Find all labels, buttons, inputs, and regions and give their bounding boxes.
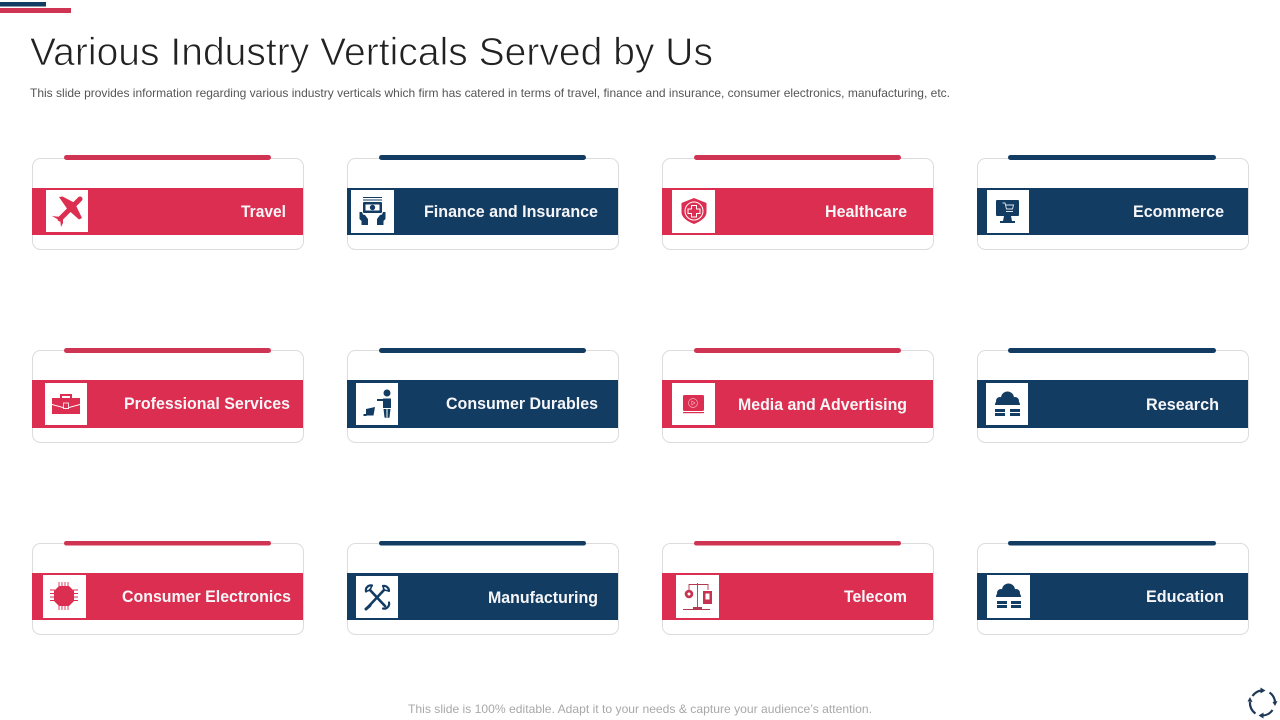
panel: Professional Services xyxy=(32,348,304,442)
panel: Manufacturing xyxy=(347,541,618,634)
icon: person with bin xyxy=(364,390,391,418)
icon: microchip xyxy=(50,582,78,610)
icon: crossed tools xyxy=(366,585,389,609)
icon: circular arrows xyxy=(1248,688,1278,718)
label: Ecommerce xyxy=(1133,203,1224,221)
panel: Education xyxy=(977,541,1248,634)
panel: Telecom xyxy=(662,541,934,634)
corner accent bars xyxy=(0,2,71,13)
icon: airplane xyxy=(52,196,82,227)
panel: Healthcare xyxy=(662,155,934,250)
label: Education xyxy=(1146,588,1224,606)
icon: online shop monitor xyxy=(996,200,1019,223)
panel: Consumer Electronics xyxy=(32,541,304,634)
label: Manufacturing xyxy=(488,589,598,607)
icon: medical shield xyxy=(682,198,706,224)
footer note: This slide is 100% editable. Adapt it to your needs & capture your audience’s attention. xyxy=(408,702,872,716)
label: Finance and Insurance xyxy=(424,203,598,221)
label: Consumer Electronics xyxy=(122,588,291,606)
panel: Travel xyxy=(32,155,304,250)
icon: balance scale xyxy=(683,583,712,610)
icon: money in hands xyxy=(360,197,386,225)
panel: Media and Advertising xyxy=(662,348,934,442)
icon: briefcase xyxy=(52,394,80,414)
icon: cloud servers xyxy=(995,392,1020,416)
label: Research xyxy=(1146,396,1219,414)
title: Various Industry Verticals Served by Us xyxy=(30,31,713,74)
label: Telecom xyxy=(844,588,907,606)
label: Healthcare xyxy=(825,203,907,221)
panel: Ecommerce xyxy=(977,155,1248,250)
label: Media and Advertising xyxy=(738,396,907,414)
label: Professional Services xyxy=(124,395,290,413)
panel: Consumer Durables xyxy=(347,348,618,442)
subtitle: This slide provides information regarding various industry verticals which firm has catered in terms of travel, finance and insurance, consumer electronics, manufacturing, etc. xyxy=(30,86,950,100)
icon: video player xyxy=(683,395,704,413)
icon: cloud servers xyxy=(996,584,1021,608)
label: Travel xyxy=(241,203,286,221)
label: Consumer Durables xyxy=(446,395,598,413)
panel: Finance and Insurance xyxy=(347,155,618,250)
panel: Research xyxy=(977,348,1248,442)
